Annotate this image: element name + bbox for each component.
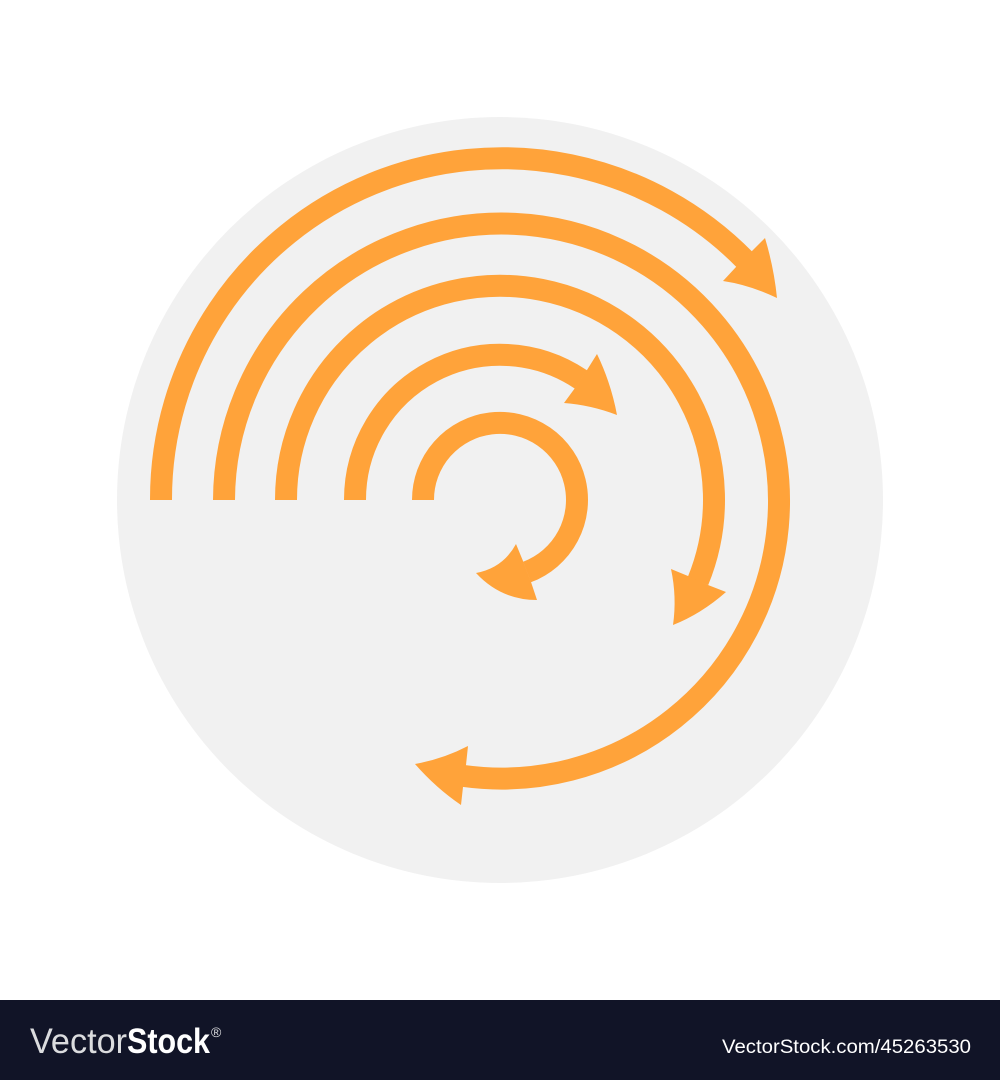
arrow: outer ring (161, 158, 777, 500)
footer logo (30, 1022, 222, 1061)
arrow: inner ring (423, 423, 577, 600)
footer logo: Stock (127, 1022, 210, 1061)
footer url: VectorStock.com/45263530 (722, 1037, 971, 1058)
footer bar (0, 1000, 1000, 1080)
background disc (117, 117, 883, 883)
arrow: fourth ring (355, 354, 617, 500)
footer logo: Vector (30, 1022, 127, 1061)
arrow: second ring (224, 224, 779, 805)
footer logo: ® (211, 1024, 222, 1040)
arrow: third ring (286, 286, 726, 625)
